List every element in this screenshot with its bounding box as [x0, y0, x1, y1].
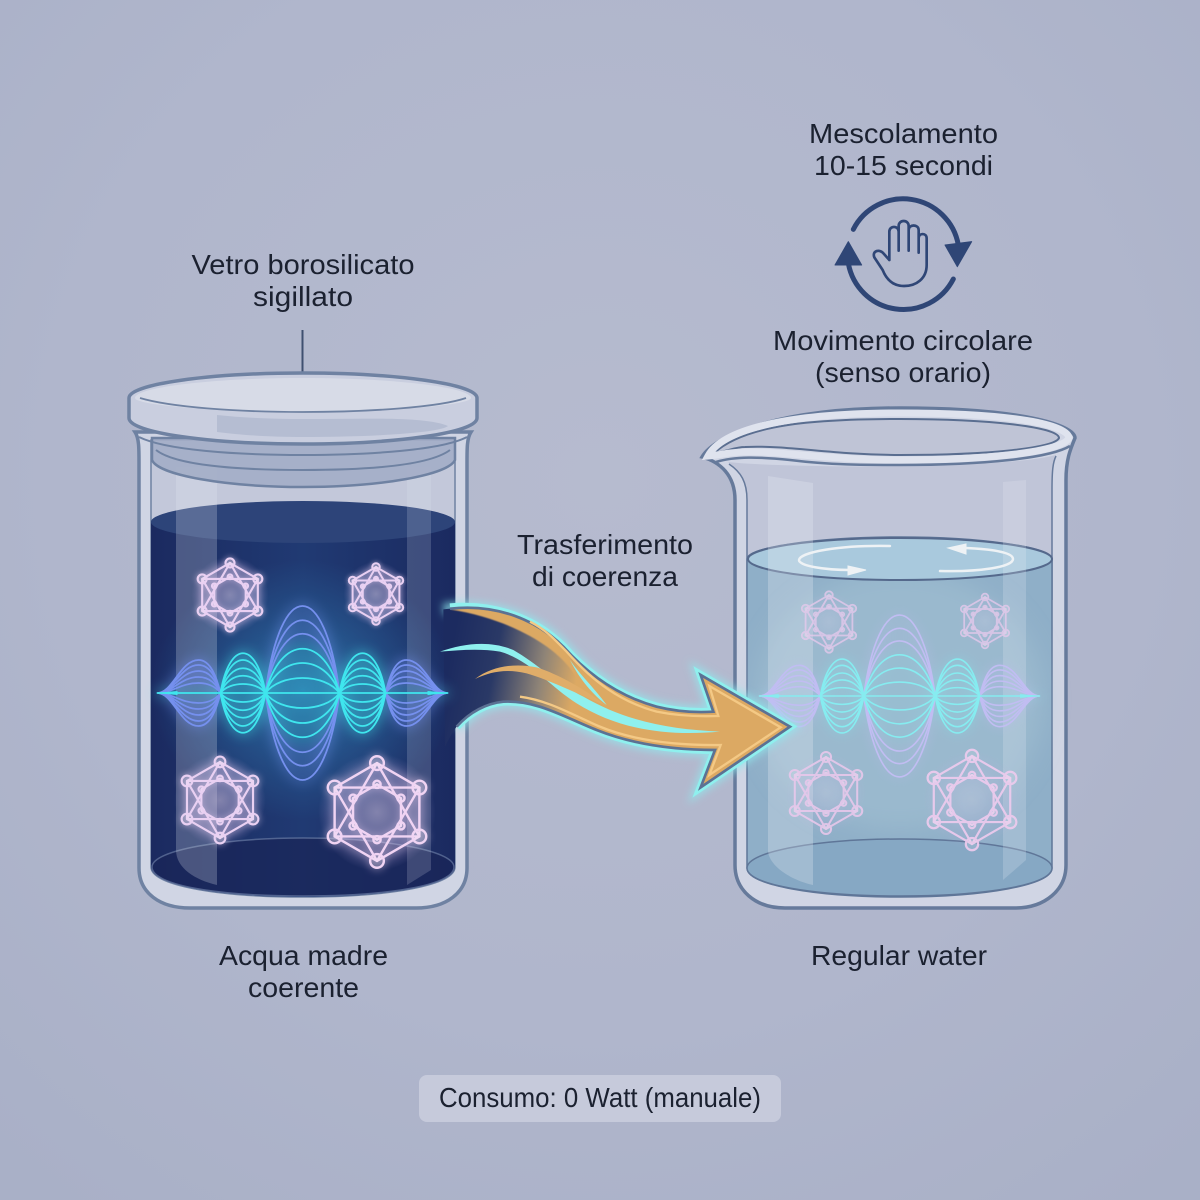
- arrowhead right: [945, 242, 972, 267]
- arrow glow: [443, 608, 790, 787]
- beaker inner wall lines: [729, 456, 1056, 600]
- neck ring: [139, 437, 467, 455]
- glass reflections: [176, 467, 217, 885]
- liquid centre lightening: [755, 570, 1045, 830]
- beaker bottom: [747, 839, 1052, 896]
- beaker lip lower edge: [716, 446, 1070, 465]
- beaker reflection left: [768, 476, 813, 885]
- lid recess: [217, 415, 448, 437]
- plug under lid: [152, 438, 455, 487]
- beaker glass: [702, 408, 1075, 908]
- arrow: transfer: [440, 607, 790, 787]
- label: vetro borosilicato sigillato: sigillato: [253, 281, 353, 312]
- arrow upper cyan stream: [570, 660, 607, 705]
- liquid glow: [151, 560, 455, 820]
- label: mescolamento: 10-15 secondi: [814, 150, 993, 181]
- beaker reflection right: [1003, 480, 1026, 880]
- label: vetro borosilicato sigillato: Vetro borosilicato: [192, 249, 414, 280]
- bottom arc: [848, 263, 953, 310]
- arrow light edge: [520, 622, 781, 775]
- label: mescolamento: [809, 118, 998, 181]
- glass body: [135, 432, 471, 908]
- label: movimento circolare: (senso orario): [815, 357, 991, 388]
- molecule: right bottom-left: [785, 752, 867, 834]
- beaker lip highlight: [708, 413, 1069, 460]
- leader line: [302, 330, 304, 373]
- label: movimento circolare: [773, 325, 1033, 388]
- liquid: [151, 502, 455, 897]
- jar: acqua madre coerente: [129, 373, 477, 908]
- label: regular water: Regular water: [811, 940, 987, 971]
- label: acqua madre coerente: coerente: [248, 972, 359, 1003]
- wave: beaker: [758, 615, 1041, 777]
- glass interior: [151, 440, 455, 897]
- molecule: left bottom-left: [174, 754, 266, 846]
- lid: [129, 373, 477, 444]
- lid top highlight: [135, 378, 471, 412]
- beaker interior: [728, 455, 1056, 897]
- badge: consumo: Consumo: 0 Watt (manuale): [439, 1082, 761, 1113]
- swirl arrows: [799, 544, 1013, 575]
- hand: [874, 221, 927, 286]
- plug inner line: [156, 450, 450, 470]
- arrow outline: [450, 608, 790, 787]
- badge: consumo: [419, 1075, 781, 1122]
- liquid bottom: [152, 838, 454, 896]
- molecule: right bottom-right: [922, 750, 1022, 850]
- wave: left jar: [156, 606, 450, 780]
- liquid surface: [748, 538, 1052, 580]
- beaker liquid: [747, 537, 1052, 897]
- top arc: [853, 199, 958, 245]
- arrowhead left: [835, 242, 862, 265]
- molecule: right top-left: [798, 591, 860, 653]
- lid inner rim: [140, 398, 466, 412]
- label: movimento circolare: Movimento circolare: [773, 325, 1033, 356]
- molecule: left top-left: [191, 556, 269, 634]
- label: trasferimento di coerenza: di coerenza: [532, 561, 678, 592]
- label: acqua madre coerente: [219, 940, 388, 1003]
- molecule: left bottom-right: [318, 753, 436, 871]
- beaker rim: [714, 419, 1059, 455]
- molecule: right top-right: [958, 594, 1012, 648]
- label: mescolamento: Mescolamento: [809, 118, 998, 149]
- liquid surface: [151, 501, 455, 543]
- label: trasferimento di coerenza: [517, 529, 693, 592]
- label: acqua madre coerente: Acqua madre: [219, 940, 388, 971]
- beaker: regular water: [702, 408, 1075, 908]
- arrow cyan sliver: [440, 644, 720, 733]
- arrow body: [443, 608, 790, 787]
- arrow tan sliver: [475, 665, 607, 706]
- molecule: left top-right: [344, 562, 408, 626]
- arrow upper tan wedge: [450, 608, 577, 679]
- icon: hand with circular arrows: [835, 199, 972, 310]
- label: trasferimento di coerenza: Trasferimento: [517, 529, 693, 560]
- label: vetro borosilicato sigillato: [192, 249, 414, 312]
- glass reflection right: [407, 467, 431, 885]
- arrow outer halo: [450, 607, 790, 787]
